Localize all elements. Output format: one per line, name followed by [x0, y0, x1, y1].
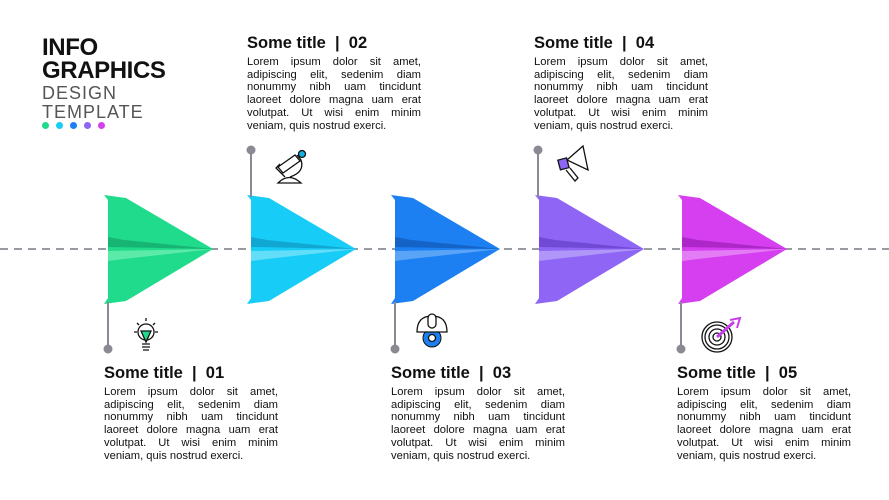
plane 5 — [678, 195, 787, 304]
text block 03: Lorem ipsum dolor sit amet, — [391, 386, 565, 398]
text block 03: volutpat. Ut wisi enim minim — [391, 437, 565, 449]
text block 02 — [247, 34, 421, 132]
text block 05: adipiscing elit, sedenim diam — [677, 399, 851, 411]
title — [42, 34, 165, 129]
connectors — [104, 146, 686, 354]
plane 1 — [104, 195, 213, 304]
text block 04: adipiscing elit, sedenim diam — [534, 69, 708, 81]
plane 2 — [247, 195, 356, 304]
text block 01: adipiscing elit, sedenim diam — [104, 399, 278, 411]
title: GRAPHICS — [42, 57, 165, 84]
text block 01: laoreet dolore magna uam erat — [104, 424, 278, 436]
text block 05: Lorem ipsum dolor sit amet, — [677, 386, 851, 398]
text block 03 — [391, 364, 565, 462]
text block 05: laoreet dolore magna uam erat — [677, 424, 851, 436]
plane 4 — [535, 195, 644, 304]
text block 02: Lorem ipsum dolor sit amet, — [247, 56, 421, 68]
text block 05 — [677, 364, 851, 462]
title: INFO — [42, 34, 98, 61]
text block 03: laoreet dolore magna uam erat — [391, 424, 565, 436]
text block 01: nonummy nibh uam tincidunt — [104, 411, 278, 423]
text block 05: Some title | 05 — [677, 364, 797, 382]
timeline dashed axis — [0, 248, 889, 250]
text block 02: laoreet dolore magna uam erat — [247, 94, 421, 106]
plane 3 — [391, 195, 500, 304]
icon: lightbulb — [134, 318, 158, 350]
text block 01 — [104, 364, 278, 462]
text block 01: veniam, quis nostrud exerci. — [104, 450, 243, 462]
text block 02: Some title | 02 — [247, 34, 367, 52]
text block 01: volutpat. Ut wisi enim minim — [104, 437, 278, 449]
text block 03: adipiscing elit, sedenim diam — [391, 399, 565, 411]
text block 04 — [534, 34, 708, 132]
text block 03: Some title | 03 — [391, 364, 511, 382]
text block 05: nonummy nibh uam tincidunt — [677, 411, 851, 423]
text block 04: laoreet dolore magna uam erat — [534, 94, 708, 106]
text block 01: Lorem ipsum dolor sit amet, — [104, 386, 278, 398]
title: TEMPLATE — [42, 102, 144, 122]
text block 02: nonummy nibh uam tincidunt — [247, 81, 421, 93]
text block 04: Lorem ipsum dolor sit amet, — [534, 56, 708, 68]
text block 03: veniam, quis nostrud exerci. — [391, 450, 530, 462]
text block 04: volutpat. Ut wisi enim minim — [534, 107, 708, 119]
text block 04: Some title | 04 — [534, 34, 654, 52]
text block 05: volutpat. Ut wisi enim minim — [677, 437, 851, 449]
text block 02: adipiscing elit, sedenim diam — [247, 69, 421, 81]
icon: target — [702, 318, 740, 352]
color dots — [42, 122, 105, 129]
text block 02: veniam, quis nostrud exerci. — [247, 120, 386, 132]
icon: helmet gear — [417, 314, 447, 347]
title: DESIGN — [42, 83, 117, 103]
text block 02: volutpat. Ut wisi enim minim — [247, 107, 421, 119]
text block 04: veniam, quis nostrud exerci. — [534, 120, 673, 132]
text block 05: veniam, quis nostrud exerci. — [677, 450, 816, 462]
icon: megaphone — [558, 146, 588, 181]
text block 03: nonummy nibh uam tincidunt — [391, 411, 565, 423]
text block 01: Some title | 01 — [104, 364, 224, 382]
icon: microscope — [276, 150, 306, 183]
text block 04: nonummy nibh uam tincidunt — [534, 81, 708, 93]
